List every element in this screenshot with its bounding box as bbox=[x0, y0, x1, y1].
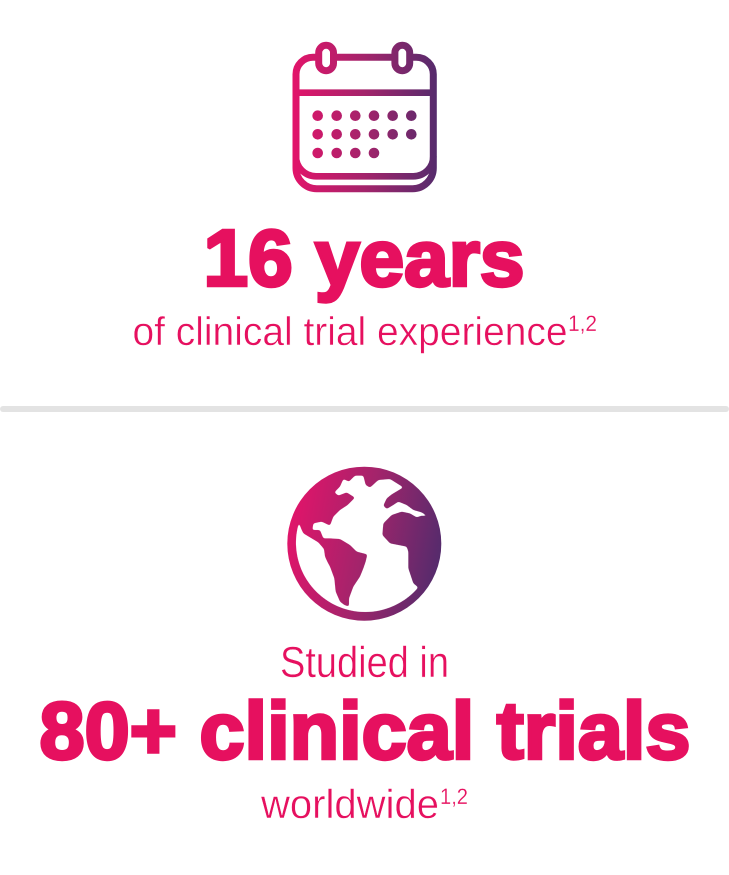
panel: clinical trial experience bbox=[132, 45, 597, 354]
text: of clinical trial experience: of clinical trial experience bbox=[132, 310, 568, 354]
text: references 1,2: 1,2 bbox=[568, 311, 597, 336]
text: worldwide: worldwide bbox=[260, 781, 439, 827]
text: references 1,2: 1,2 bbox=[440, 784, 468, 809]
icon: globe bbox=[287, 467, 441, 621]
panel: clinical trials worldwide bbox=[40, 467, 690, 827]
heading: 16 years: 16 years bbox=[204, 214, 524, 302]
heading: 80+ clinical trials: 80+ clinical trials bbox=[40, 686, 690, 776]
icon: calendar bbox=[296, 45, 433, 189]
text: Studied in: Studied in bbox=[280, 638, 449, 687]
